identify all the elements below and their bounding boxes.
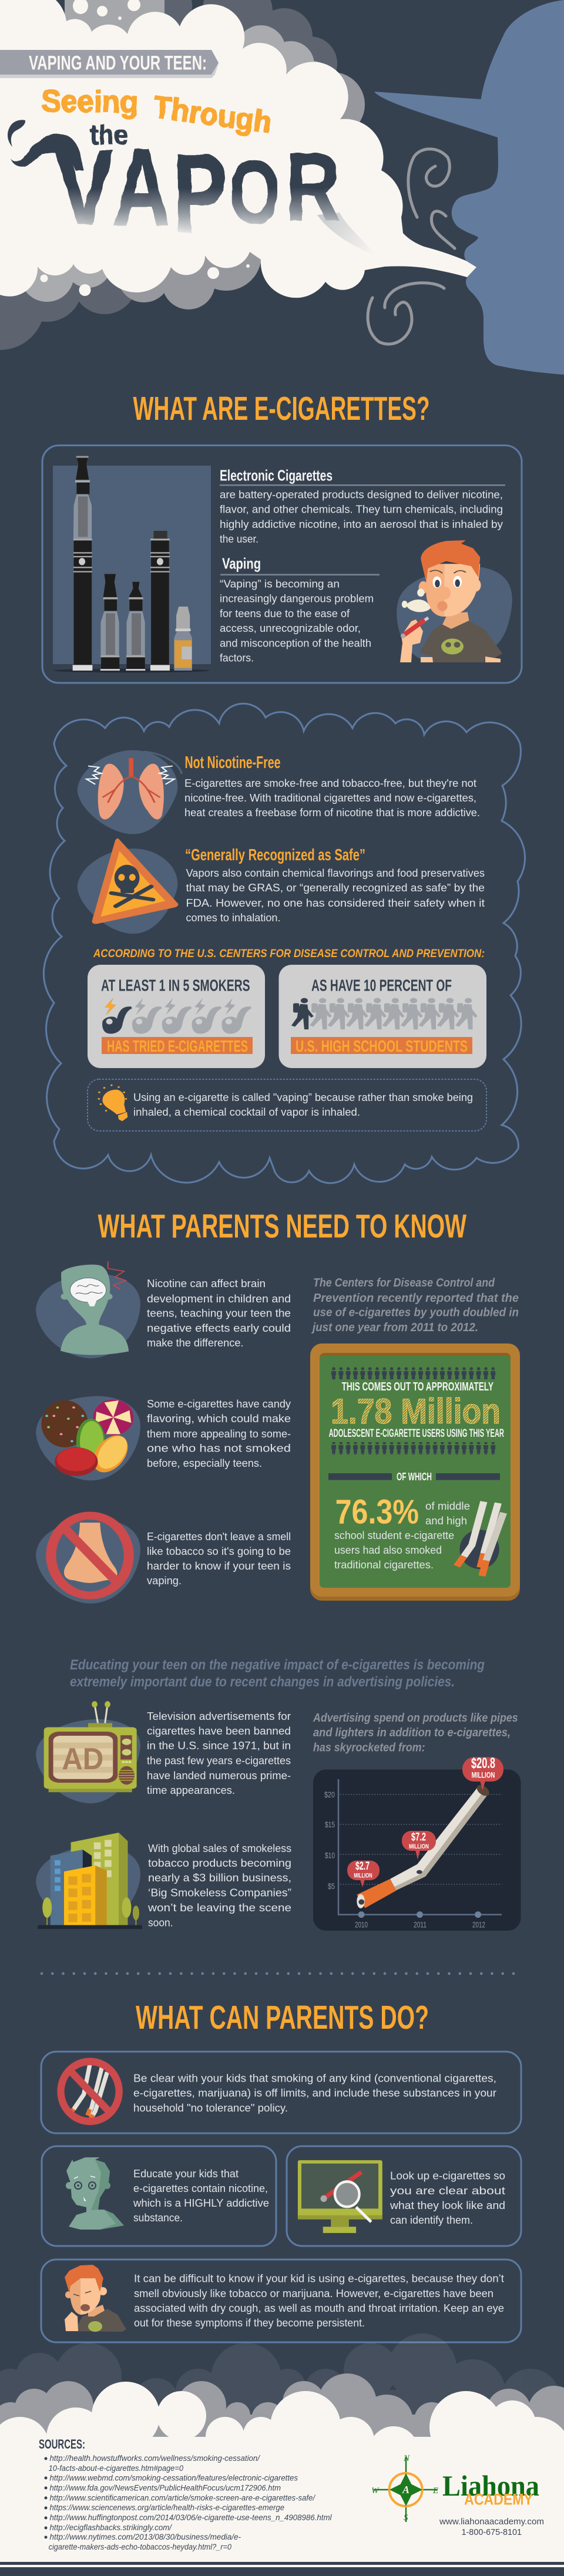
panel: look up e-cigarettes: what they look like and	[390, 2200, 505, 2211]
axis labels: 2012	[472, 1920, 485, 1930]
title: VAPOR: A	[113, 126, 170, 249]
callout: 2010 value: $2.7	[355, 1860, 370, 1873]
heading: electronic cigarettes: Electronic Cigarettes	[220, 466, 333, 484]
stat card: smokers: AT LEAST 1 IN 5 SMOKERS	[101, 976, 250, 995]
icon: dizzy teen	[66, 2157, 124, 2230]
hat silhouette figure	[374, 0, 564, 375]
text: advertising spend: and lighters in addition to e-cigarettes,	[313, 1726, 511, 1739]
stat text: approximately: THIS COMES OUT TO APPROXIMATELY	[342, 1380, 494, 1393]
title: the: the	[90, 119, 128, 150]
text: educating your teen: Educating your teen on the negative impact of e-cigarettes is becoming	[70, 1657, 485, 1673]
source list: http://www.nytimes.com/2013/08/30/business/media/e-	[49, 2533, 241, 2541]
axis labels: $20	[324, 1790, 335, 1799]
text: candy flavoring: one who has not smoked	[147, 1442, 291, 1454]
stat card: smokers	[88, 965, 265, 1068]
text: generally recognized as safe: Vapors also contain chemical flavorings and food preservatives	[186, 867, 485, 879]
axis labels	[324, 1790, 485, 1930]
panel: no tolerance: Be clear with your kids that smoking of any kind (conventional cigarettes,	[133, 2072, 496, 2084]
cigarette line	[357, 1784, 492, 1908]
text: candy flavoring: flavoring, which could make	[147, 1413, 291, 1425]
text: smokeless tobacco: won’t be leaving the scene	[147, 1902, 291, 1914]
text: no smell: harder to know if your teen is	[147, 1560, 291, 1572]
text: middle and high school: users had also smoked	[334, 1544, 442, 1556]
text: no smell: like tobacco so it's going to be	[147, 1545, 291, 1557]
callout: 2012 value: MILLION	[472, 1770, 495, 1780]
text: not nicotine-free: nicotine-free. With traditional cigarettes and now e-cigarettes,	[184, 792, 476, 804]
title: VAPOR: R	[286, 133, 340, 241]
text: nicotine and brain: Nicotine can affect brain	[147, 1278, 266, 1289]
contact details: www.liahonaacademy.com	[439, 2517, 544, 2527]
axis labels: 2010	[355, 1920, 368, 1930]
icon: light bulb	[98, 1085, 127, 1121]
text: vaping: access, unrecognizable odor,	[220, 622, 361, 634]
text: vaping: for teens due to the ease of	[220, 608, 350, 619]
source list: https://www.sciencenews.org/article/health-risks-e-cigarettes-emerge	[49, 2503, 284, 2512]
text: educating your teen	[70, 1657, 485, 1690]
chart: advertising spend	[313, 1755, 521, 1931]
text: nicotine and brain: development in children and	[147, 1293, 291, 1305]
text: television ads: time appearances.	[147, 1784, 235, 1796]
text: smokeless tobacco: tobacco products becoming	[148, 1857, 291, 1869]
logo: compass: W	[371, 2486, 380, 2496]
text: middle and high school	[334, 1500, 470, 1571]
icon: no smoking	[61, 2062, 119, 2122]
title: VAPOR: O	[229, 143, 280, 241]
callout: 2010 value	[347, 1860, 380, 1887]
text: candy flavoring	[147, 1398, 291, 1469]
divider: of which: OF WHICH	[397, 1471, 432, 1483]
panel: no tolerance	[41, 2052, 521, 2133]
text: smokeless tobacco: ‘Big Smokeless Companies”	[148, 1887, 291, 1899]
icon: three cigarettes	[456, 1501, 503, 1576]
panel: educate kids: substance.	[133, 2212, 183, 2224]
text: candy flavoring: them more appealing to some-	[147, 1428, 291, 1440]
panel: symptoms: smell obviously like tobacco or marijuana. However, e-cigarettes have been	[134, 2288, 494, 2299]
text: nicotine and brain: negative effects early could	[147, 1322, 291, 1334]
stat card: students: AS HAVE 10 PERCENT OF	[311, 976, 452, 995]
panel: look up e-cigarettes: you are clear about	[390, 2185, 505, 2197]
panel: no tolerance: e-cigarettes, marijuana) is off limits, and include these substances in your	[133, 2087, 496, 2099]
text: candy flavoring: before, especially teens.	[147, 1457, 262, 1469]
text: smokeless tobacco: soon.	[148, 1917, 173, 1929]
source list: 10-facts-about-e-cigarettes.htm#page=0	[49, 2464, 183, 2473]
title: vapor droplet	[8, 120, 25, 147]
panel: symptoms: associated with dry cough, as well as mouth and throat irritation. Keep an eye	[134, 2302, 504, 2314]
panel: educate kids: which is a HIGHLY addictive	[133, 2197, 269, 2209]
heading: according to the CDC: ACCORDING TO THE U.S. CENTERS FOR DISEASE CONTROL AND PREVENTION:	[93, 948, 485, 960]
text: advertising spend: Advertising spend on products like pipes	[313, 1712, 518, 1725]
icon: city buildings	[36, 1833, 142, 1929]
source list: http://www.webmd.com/smoking-cessation/features/electronic-cigarettes	[49, 2474, 298, 2483]
panel: symptoms: out for these symptoms if they become persistent.	[134, 2317, 365, 2329]
text: television ads: in the U.S. since 1971, but in	[147, 1740, 291, 1752]
icon: retro tv: AD	[62, 1742, 103, 1776]
callout: 2010 value: MILLION	[354, 1873, 372, 1880]
stat card: students	[278, 965, 486, 1068]
text: not nicotine-free: E-cigarettes are smoke-free and tobacco-free, but they're not	[184, 777, 476, 789]
icon: lungs	[78, 750, 182, 834]
panel: chalkboard stats	[310, 1343, 520, 1601]
text: CDC report	[311, 1277, 519, 1334]
axis labels: $5	[328, 1881, 335, 1891]
text: educating your teen: extremely important due to recent changes in advertising policies.	[70, 1674, 455, 1690]
text: nicotine and brain: make the difference.	[147, 1337, 243, 1349]
logo: compass: N	[403, 2454, 410, 2463]
logo: Liahona Academy wordmark: ACADEMY	[464, 2491, 533, 2508]
text: electronic cigarettes: highly addictive nicotine, into an aerosol that is inhaled by	[220, 518, 503, 530]
cloud bubbles	[40, 0, 250, 296]
text: not nicotine-free	[184, 777, 480, 819]
heading: what can parents do: WHAT CAN PARENTS DO?	[136, 1999, 429, 2036]
panel: educate kids: Educate your kids that	[133, 2168, 239, 2180]
text: no smell: vaping.	[147, 1575, 182, 1587]
panel: symptoms: It can be difficult to know if your kid is using e-cigarettes, because they don’t	[134, 2273, 504, 2285]
stat card: smokers: HAS TRIED E-CIGARETTES	[107, 1037, 248, 1055]
title: Seeing Through: Seeing	[41, 84, 139, 120]
title: VAPOR: V	[55, 129, 114, 245]
title banner	[0, 50, 219, 78]
panel: no tolerance: household "no tolerance" policy.	[133, 2102, 288, 2114]
source list	[45, 2454, 332, 2551]
icon: coughing teen	[65, 2265, 126, 2332]
panel: look up e-cigarettes: can identify them.	[390, 2214, 473, 2226]
heading: generally recognized as safe: “Generally Recognized as Safe”	[185, 846, 365, 864]
text: television ads: the past few years e-cigarettes	[147, 1755, 291, 1766]
text: advertising spend: has skyrocketed from:	[313, 1742, 425, 1755]
text: electronic cigarettes: the user.	[220, 533, 258, 545]
icon: no smell nose	[36, 1516, 140, 1604]
stat: 1.78 million: 1.78 Million	[331, 1392, 501, 1431]
stat: 76.3 percent: 76.3%	[335, 1493, 419, 1531]
title cloud back layers	[0, 0, 365, 350]
icon: monitor and magnifier	[298, 2160, 382, 2233]
panel: look up e-cigarettes	[287, 2146, 521, 2246]
text: electronic cigarettes: flavor, and other chemicals. They turn chemicals, including	[220, 504, 503, 516]
text: generally recognized as safe: comes to inhalation.	[186, 912, 281, 924]
icon: ten students	[291, 998, 478, 1029]
panel: what are e-cigarettes	[42, 445, 522, 683]
people row top	[331, 1367, 497, 1379]
axis labels: $15	[325, 1820, 335, 1829]
text: CDC report: The Centers for Disease Control and	[313, 1277, 495, 1289]
teen hand and vape	[400, 619, 423, 662]
icon: teen vaping	[397, 540, 512, 662]
heading: not nicotine-free: Not Nicotine-Free	[184, 753, 281, 772]
logo: compass: S	[404, 2513, 408, 2523]
footer clouds	[0, 2333, 564, 2562]
text: middle and high school: of middle	[425, 1500, 470, 1512]
icon: brain head	[36, 1261, 140, 1358]
text: smokeless tobacco: With global sales of smokeless	[148, 1843, 291, 1854]
text: candy flavoring: Some e-cigarettes have candy	[147, 1398, 291, 1410]
text: vaping: and misconception of the health	[220, 638, 371, 649]
logo: compass: A	[402, 2484, 409, 2496]
source list: cigarette-makers-ads-echo-tobaccos-heyday.html?_r=0	[49, 2543, 231, 2551]
panel: symptoms	[41, 2260, 521, 2342]
title cloud white	[0, 0, 476, 298]
text: nicotine and brain: teens, teaching your teen the	[147, 1307, 291, 1319]
title: VAPOR: P	[173, 132, 227, 256]
text: no smell: E-cigarettes don't leave a smell	[147, 1531, 291, 1543]
text: no smell	[147, 1531, 291, 1587]
stat card: students: U.S. HIGH SCHOOL STUDENTS	[296, 1037, 468, 1055]
panel: educate kids: e-cigarettes contain nicotine,	[133, 2183, 268, 2194]
text: middle and high school: traditional cigarettes.	[334, 1559, 434, 1571]
text: nicotine and brain	[147, 1278, 291, 1349]
callout: 2011 value: MILLION	[409, 1843, 429, 1850]
axis dots	[358, 1911, 481, 1918]
text: vaping: factors.	[220, 652, 254, 664]
contact details	[439, 2517, 544, 2537]
divider: of which	[328, 1471, 500, 1483]
callout: 2011 value	[402, 1831, 436, 1860]
text: advertising spend	[313, 1712, 518, 1755]
source list: http://www.fda.gov/NewsEvents/PublicHealthFocus/ucm172906.htm	[49, 2484, 281, 2493]
teen shirt and skull	[419, 621, 502, 662]
contact details: 1-800-675-8101	[462, 2527, 522, 2537]
text: generally recognized as safe	[186, 867, 485, 924]
logo: Liahona Academy wordmark: Liahona	[442, 2469, 539, 2502]
icon: warning skull	[78, 839, 178, 934]
text: smokeless tobacco	[147, 1843, 291, 1929]
axis labels: $10	[325, 1851, 335, 1860]
title banner: VAPING AND YOUR TEEN:	[29, 52, 207, 74]
text: not nicotine-free: heat creates a freebase form of nicotine that is more addictive.	[184, 807, 480, 819]
logo: compass: E	[432, 2486, 438, 2496]
text: vaping: “Vaping” is becoming an	[220, 578, 340, 590]
text: CDC report: just one year from 2011 to 2012.	[311, 1321, 478, 1334]
title: Seeing Through: Through	[151, 90, 274, 140]
title: vapor fade tail	[317, 213, 378, 257]
text: middle and high school: and high	[425, 1515, 467, 1527]
text: CDC report: Prevention recently reported that the	[313, 1292, 519, 1305]
text: generally recognized as safe: FDA. However, no one has considered their safety when it	[186, 897, 485, 909]
text: vaping: increasingly dangerous problem	[220, 593, 374, 605]
text: television ads	[147, 1710, 291, 1796]
icon: e-cigarette devices	[53, 456, 209, 672]
device backdrop	[53, 466, 211, 664]
source list: http://www.huffingtonpost.com/2014/03/06/e-cigarette-use-teens_n_4908986.html	[49, 2513, 332, 2522]
heading: sources: SOURCES:	[39, 2437, 85, 2452]
text: generally recognized as safe: that may be GRAS, or “generally recognized as safe” by the	[186, 882, 485, 894]
heading: vaping: Vaping	[222, 555, 261, 573]
text: television ads: have landed numerous prime-	[147, 1770, 291, 1782]
panel: educate kids	[42, 2146, 276, 2246]
text: electronic cigarettes	[220, 489, 503, 545]
title: VAPOR	[11, 126, 340, 256]
panel: look up e-cigarettes: Look up e-cigarettes so	[390, 2170, 505, 2182]
callout: 2012 value	[462, 1755, 503, 1790]
icon: five pipes	[102, 998, 251, 1034]
panel: cloud outline	[43, 703, 525, 1183]
axis labels: 2011	[414, 1920, 427, 1930]
callout: 2012 value: $20.8	[471, 1755, 495, 1772]
people row bottom	[331, 1442, 497, 1454]
smoke swirls	[368, 149, 455, 344]
text: smokeless tobacco: nearly a $3 billion business,	[148, 1872, 291, 1884]
source list: http://ecigflashbacks.strikingly.com/	[49, 2523, 172, 2532]
title: Seeing Through	[41, 84, 274, 140]
logo: compass	[371, 2454, 438, 2523]
callout: why it is called vaping: Using an e-cigarette is called "vaping” because rather than smoke being	[133, 1092, 473, 1103]
callout: why it is called vaping: inhaled, a chemical cocktail of vapor is inhaled.	[133, 1106, 360, 1118]
text: television ads: cigarettes have been banned	[147, 1725, 291, 1737]
text: middle and high school: school student e-cigarette	[334, 1530, 454, 1541]
footer stripes	[0, 2562, 564, 2567]
icon: retro tv	[36, 1701, 140, 1803]
text: CDC report: use of e-cigarettes by youth doubled in	[313, 1306, 519, 1319]
source list: http://www.scientificamerican.com/article/smoke-screen-are-e-cigarettes-safe/	[49, 2494, 315, 2503]
callout: why it is called vaping	[88, 1079, 486, 1131]
text: television ads: Television advertisements for	[147, 1710, 291, 1722]
callout: 2011 value: $7.2	[411, 1831, 426, 1844]
source list: http://health.howstuffworks.com/wellness/smoking-cessation/	[49, 2454, 260, 2463]
icon: candy	[36, 1396, 140, 1480]
text: vaping	[220, 578, 374, 664]
text: electronic cigarettes: are battery-operated products designed to deliver nicotine,	[220, 489, 503, 500]
